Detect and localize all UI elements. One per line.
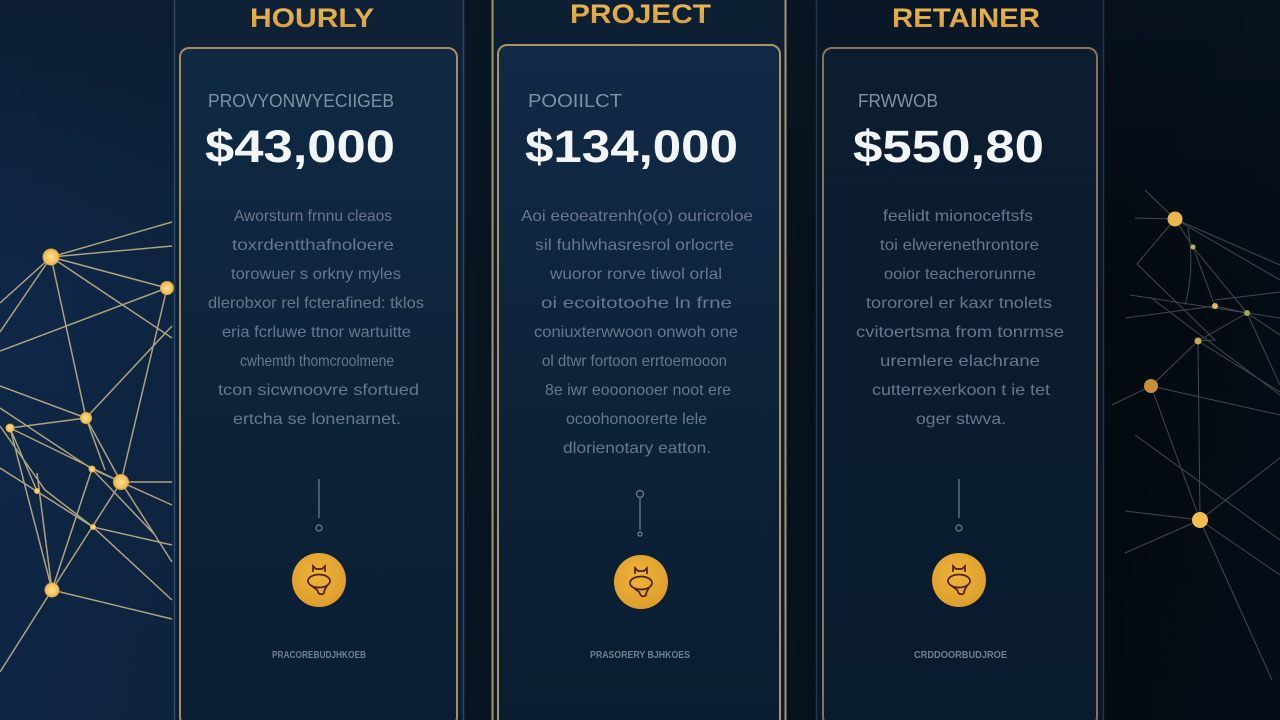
retainer connector: [956, 479, 962, 531]
project description: dlorienotary eatton.: [563, 440, 711, 457]
project connector: [636, 490, 644, 536]
hourly description: torowuer s orkny myles: [231, 266, 401, 283]
hourly description: eria fcrluwe ttnor wartuitte: [222, 324, 411, 341]
project description: Aoi eeoeatrenh(o(o) ouricroloe: [521, 208, 753, 225]
project inner panel: [498, 45, 780, 720]
retainer description: oger stwva.: [916, 411, 1006, 428]
hourly description: [208, 208, 424, 428]
hourly heading: HOURLY: [250, 3, 374, 33]
project description: ol dtwr fortoon errtoemooon: [542, 353, 727, 370]
project description: wuoror rorve tiwol orlal: [549, 266, 722, 283]
project footer label: PRASORERY BJHKOES: [590, 650, 690, 661]
project subtitle: POOIILCT: [528, 91, 622, 111]
retainer description: feelidt mionoceftsfs: [883, 208, 1033, 225]
hourly description: cwhemth thomcroolmene: [240, 353, 394, 370]
project price: $134,000: [525, 121, 738, 172]
project description: [521, 208, 753, 457]
hourly description: ertcha se lonenarnet.: [233, 411, 401, 428]
project outer card: [492, 0, 786, 720]
retainer outer card: [816, 0, 1104, 720]
retainer description: toi elwerenethrontore: [880, 237, 1039, 254]
icon: hourly gold coin: [292, 553, 346, 607]
project description: oi ecoitotoohe ln frne: [541, 295, 732, 312]
retainer inner panel: [823, 48, 1097, 720]
panel: hourly: [174, 0, 464, 720]
hourly description: tcon sicwnoovre sfortued: [218, 382, 419, 399]
hourly subtitle: PROVYONWYECIIGEB: [208, 91, 394, 111]
retainer description: uremlere elachrane: [880, 353, 1040, 370]
project description: ocoohonoorerte lele: [566, 411, 707, 428]
project description: sil fuhlwhasresrol orlocrte: [535, 237, 734, 254]
project description: 8e iwr eooonooer noot ere: [545, 382, 731, 399]
hourly footer label: PRACOREBUDJHKOEB: [272, 650, 366, 661]
retainer price: $550,80: [853, 121, 1044, 172]
retainer footer label: CRDDOORBUDJROE: [914, 650, 1007, 661]
retainer heading: RETAINER: [892, 3, 1040, 33]
icon: project gold coin: [614, 555, 668, 609]
hourly inner panel: [180, 48, 457, 720]
left gold network graphic: [0, 222, 174, 672]
hourly price: $43,000: [205, 121, 395, 172]
right gold network graphic: [1112, 190, 1280, 680]
retainer description: torororel er kaxr tnolets: [866, 295, 1052, 312]
retainer subtitle: FRWWOB: [858, 91, 938, 111]
retainer description: ooior teacherorunrne: [884, 266, 1036, 283]
icon: retainer gold coin: [932, 553, 986, 607]
hourly outer card: [174, 0, 464, 720]
retainer description: cutterrexerkoon t ie tet: [872, 382, 1051, 399]
retainer description: [856, 208, 1064, 428]
hourly description: dlerobxor rel fcterafined: tklos: [208, 295, 424, 312]
hourly description: toxrdentthafnoloere: [232, 237, 394, 254]
hourly description: Aworsturn frnnu cleaos: [234, 208, 392, 225]
panel: project: [492, 0, 786, 720]
retainer description: cvitoertsma from tonrmse: [856, 324, 1064, 341]
project description: coniuxterwwoon onwoh one: [534, 324, 738, 341]
hourly connector: [316, 479, 322, 531]
panel: retainer: [816, 0, 1104, 720]
